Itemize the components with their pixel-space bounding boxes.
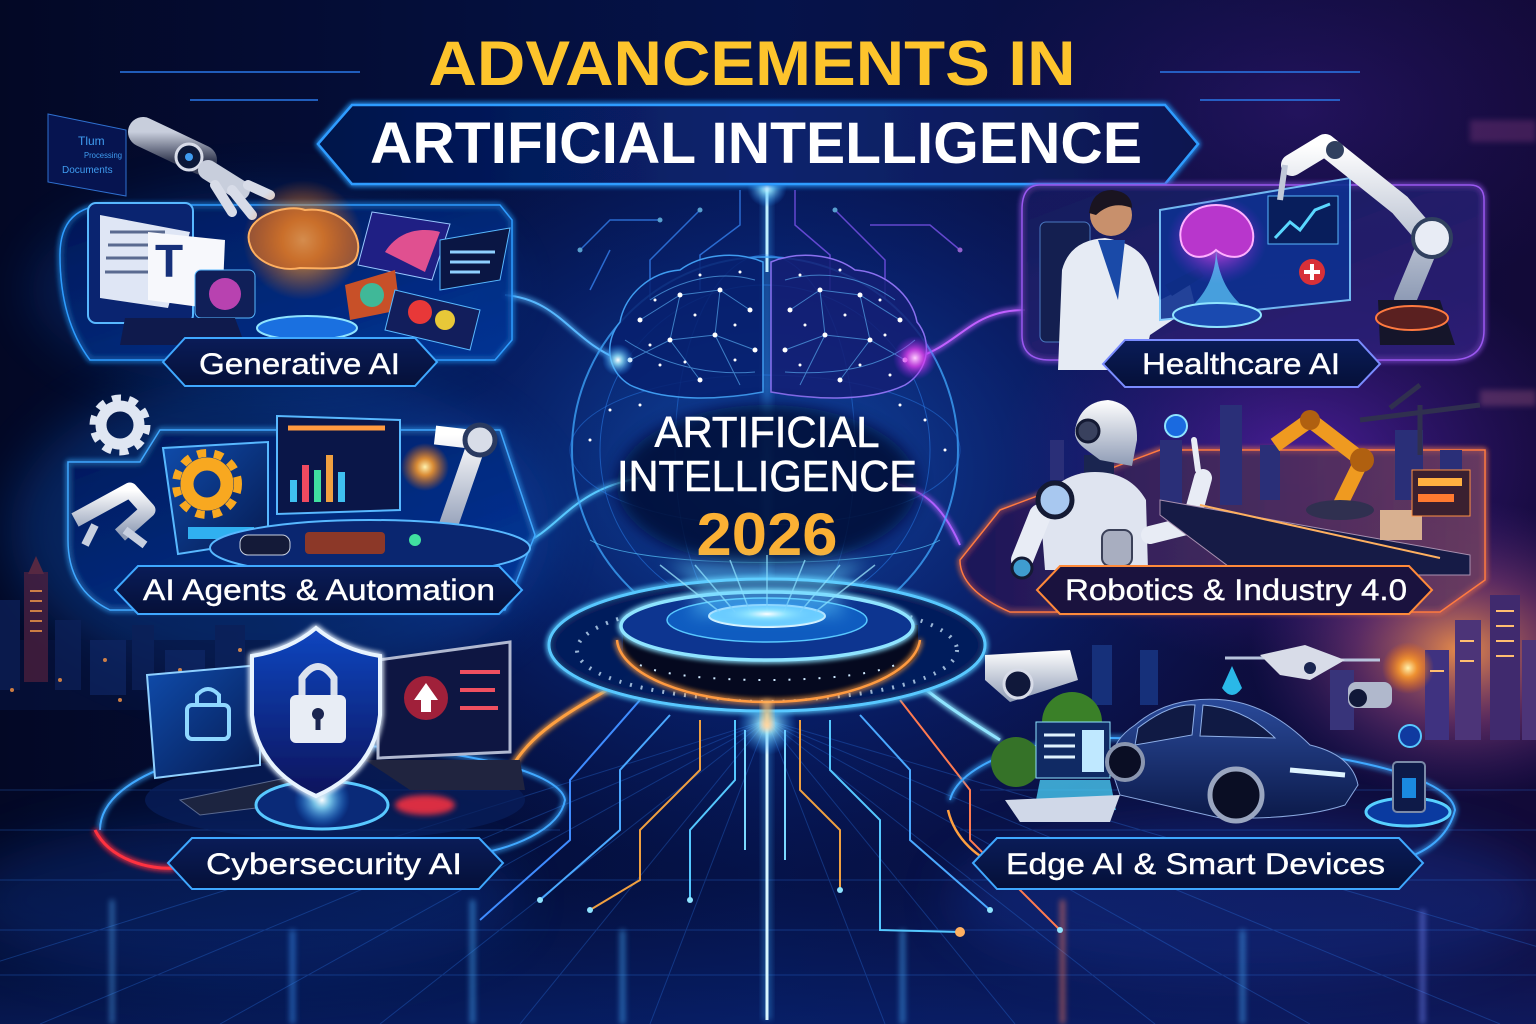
panel: healthcare ai bbox=[1022, 141, 1484, 387]
floor grid bbox=[0, 720, 1536, 1024]
icon: robot hand bbox=[75, 490, 148, 545]
icon: humanoid robot bbox=[1012, 400, 1203, 578]
title: advancements in: ADVANCEMENTS IN bbox=[428, 29, 1076, 99]
light streaks on the floor bbox=[110, 900, 1425, 1024]
icon: control desk bbox=[210, 520, 530, 576]
panel: ai agents and automation bbox=[68, 398, 535, 614]
icon: security camera bbox=[985, 650, 1078, 702]
icon: industrial robot arm bbox=[425, 425, 495, 550]
panel: cybersecurity ai bbox=[95, 628, 565, 889]
label: ai agents and automation bbox=[115, 566, 522, 614]
label: healthcare ai bbox=[1103, 340, 1380, 387]
hub dark text backing bbox=[617, 405, 917, 565]
panel frame bbox=[1022, 185, 1484, 360]
hub text: artificial: ARTIFICIAL bbox=[654, 408, 880, 457]
icon: shield with padlock bbox=[252, 628, 388, 829]
icon: floating text sign: Processing bbox=[84, 151, 122, 160]
icon: right monitor bbox=[365, 642, 525, 815]
panel: robotics and industry bbox=[960, 385, 1485, 614]
icon: left monitor bbox=[147, 665, 320, 815]
orange rim bbox=[617, 640, 920, 702]
icon: surgical robot arm bbox=[1280, 141, 1455, 345]
icon: smart car bbox=[1107, 699, 1358, 821]
rising light rays bbox=[660, 555, 875, 612]
icon: floating text sign: Tlum bbox=[78, 134, 105, 148]
central circuit traces bbox=[480, 700, 1063, 937]
icon: assembly line bbox=[1160, 470, 1470, 575]
robot headset bbox=[1077, 420, 1099, 442]
ring of light dots bbox=[577, 600, 957, 700]
icon: drone bbox=[1222, 645, 1380, 695]
holographic sphere bbox=[570, 255, 960, 645]
panel ground ring bbox=[95, 744, 565, 868]
upper circuit traces bbox=[578, 190, 962, 300]
icon: analytics dashboard bbox=[277, 416, 449, 514]
robot right arm bbox=[1150, 478, 1203, 535]
label: cybersecurity ai: Cybersecurity AI bbox=[206, 848, 462, 881]
icon: smart device on ring bbox=[1366, 725, 1450, 826]
label: edge ai and smart devices: Edge AI & Smart Devices bbox=[1006, 848, 1385, 881]
vertical central light beam bbox=[737, 167, 797, 1020]
icon: brain hologram screen bbox=[1160, 178, 1350, 327]
robot head bbox=[1075, 400, 1137, 466]
robot clasped hand bbox=[1102, 530, 1132, 566]
central hub bbox=[570, 255, 960, 645]
panel frame bbox=[68, 430, 535, 610]
city skyline: right bbox=[1092, 595, 1536, 740]
holographic platform bbox=[549, 555, 985, 730]
icon: gear screen bbox=[163, 442, 268, 554]
label: robotics and industry bbox=[1037, 566, 1432, 614]
label: robotics and industry: Robotics & Industry 4.0 bbox=[1065, 574, 1407, 607]
title banner bbox=[120, 72, 1360, 184]
panel ground ring bbox=[948, 738, 1455, 865]
icon: floating text sign bbox=[48, 114, 126, 196]
robot neck bbox=[1084, 455, 1114, 483]
robot wrist bbox=[1012, 558, 1032, 578]
city skyline: left bbox=[0, 556, 270, 710]
icon: robot arm with brain bbox=[143, 132, 363, 340]
lower gold glint bbox=[762, 700, 772, 730]
neural brain bbox=[588, 255, 946, 452]
icon: crane bbox=[1360, 385, 1480, 455]
icon: doctor bbox=[1040, 190, 1204, 370]
label: ai agents and automation: AI Agents & Automation bbox=[143, 574, 495, 607]
outer ring bbox=[549, 579, 985, 711]
icon: gear bbox=[93, 398, 147, 452]
robot pointing finger bbox=[1194, 440, 1198, 470]
icon: skyline bbox=[1050, 405, 1462, 510]
hub text: intelligence: INTELLIGENCE bbox=[617, 452, 917, 501]
label: generative ai bbox=[163, 338, 437, 386]
label: edge ai and smart devices bbox=[973, 838, 1423, 889]
robot left arm bbox=[1022, 515, 1040, 560]
robot torso bbox=[1040, 472, 1148, 570]
icon: text documents: T bbox=[155, 235, 183, 287]
dark drum bbox=[623, 625, 918, 700]
connector lines from hub to panels bbox=[505, 295, 1025, 770]
robot shoulder joint bbox=[1038, 483, 1072, 517]
hub text: year: 2026 bbox=[696, 501, 838, 568]
panel frame bbox=[60, 205, 512, 360]
icon: orange robot arm bbox=[1275, 410, 1374, 520]
rising glow bbox=[665, 562, 870, 615]
label: cybersecurity ai bbox=[168, 838, 503, 889]
icon: text documents bbox=[88, 203, 255, 345]
drum dots bbox=[640, 665, 895, 680]
icon: floating text sign: Documents bbox=[62, 165, 113, 176]
panel: generative ai bbox=[48, 114, 512, 386]
icon: small camera bbox=[1348, 682, 1392, 708]
platform top bbox=[621, 592, 913, 660]
floating hologram icon bbox=[1165, 415, 1187, 437]
icon: smart planter kiosk bbox=[991, 692, 1120, 822]
panel: edge ai and smart devices bbox=[948, 645, 1455, 889]
label: healthcare ai: Healthcare AI bbox=[1142, 348, 1340, 381]
panel frame bbox=[960, 450, 1485, 612]
title: artificial intelligence: ARTIFICIAL INTELLIGENCE bbox=[370, 111, 1142, 176]
label: generative ai: Generative AI bbox=[199, 348, 400, 381]
icon: image screens bbox=[345, 212, 510, 350]
